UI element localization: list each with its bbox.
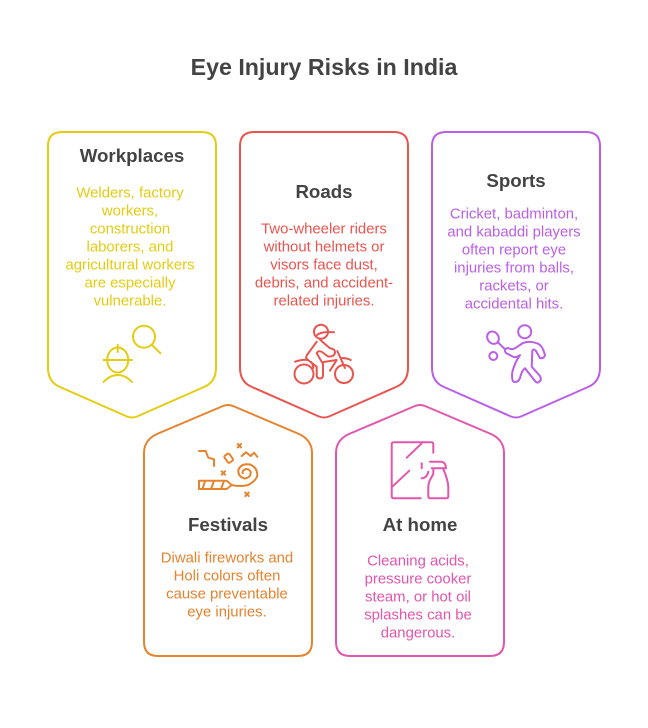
text: at home: dangerous. <box>381 626 455 642</box>
text: roads: Two-wheeler riders <box>261 222 387 238</box>
panel outline: workplaces <box>48 132 216 418</box>
title: Eye Injury Risks in India <box>191 54 458 80</box>
text: at home: splashes can be <box>364 608 472 624</box>
text: roads: debris, and accident- <box>255 276 393 292</box>
panel: roads <box>240 132 408 418</box>
icon: worker with magnifier <box>104 326 160 382</box>
text: sports: injuries from balls, <box>454 260 574 276</box>
heading: roads: Roads <box>295 181 353 202</box>
text: at home: pressure cooker <box>365 572 471 588</box>
text: workplaces: Welders, factory <box>76 186 184 202</box>
text: workplaces: are especially <box>84 276 176 292</box>
text: festivals: Diwali fireworks and <box>161 550 293 566</box>
text: festivals: cause preventable <box>166 586 288 602</box>
panel: sports <box>432 132 600 418</box>
text: sports: and kabaddi players <box>447 224 581 240</box>
panel: festivals <box>144 405 312 656</box>
text: roads: visors face dust, <box>270 258 378 274</box>
icon: motorcycle rider <box>294 325 353 384</box>
text: roads: related injuries. <box>274 294 374 310</box>
heading: sports: Sports <box>486 170 546 191</box>
panel: workplaces <box>48 132 216 418</box>
panel outline: at home <box>336 405 504 656</box>
text: workplaces: construction <box>90 222 170 238</box>
text: festivals: Holi colors often <box>174 568 280 584</box>
text: at home: steam, or hot oil <box>365 590 471 606</box>
text: sports: Cricket, badminton, <box>450 206 578 222</box>
heading: at home: At home <box>383 514 457 535</box>
icon: window and spray bottle <box>392 442 448 498</box>
heading: workplaces: Workplaces <box>80 145 184 166</box>
text: workplaces: laborers, and <box>87 240 173 256</box>
icon: party popper <box>199 444 257 496</box>
heading: festivals: Festivals <box>188 514 268 535</box>
panel outline: roads <box>240 132 408 418</box>
text: workplaces: workers, <box>101 204 158 220</box>
icon: badminton player <box>485 325 545 383</box>
panel outline: sports <box>432 132 600 418</box>
text: roads: without helmets or <box>263 240 384 256</box>
text: sports: accidental hits. <box>465 296 563 312</box>
panel outline: festivals <box>144 405 312 656</box>
text: at home: Cleaning acids, <box>367 554 469 570</box>
text: workplaces: agricultural workers <box>65 258 195 274</box>
text: festivals: eye injuries. <box>187 604 267 620</box>
panel: at home <box>336 405 504 656</box>
text: workplaces: vulnerable. <box>94 294 166 310</box>
text: sports: often report eye <box>462 242 566 258</box>
text: sports: rackets, or <box>479 278 549 294</box>
